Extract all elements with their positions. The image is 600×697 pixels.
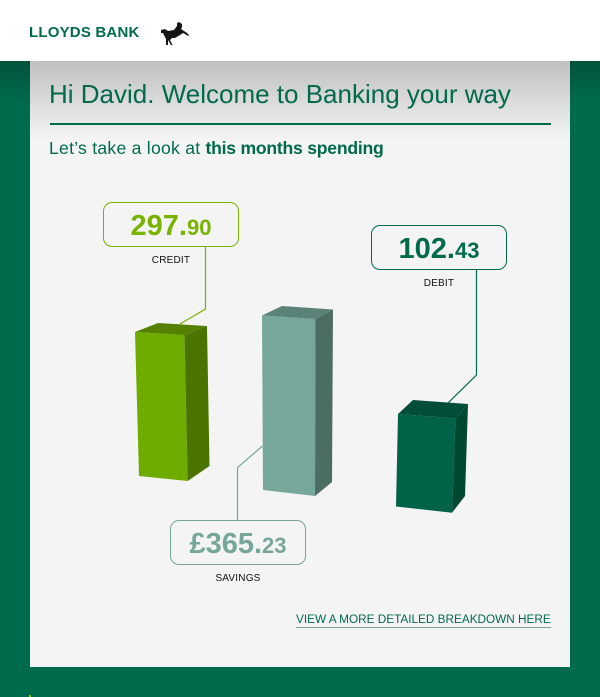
accent mark bottom left xyxy=(29,695,31,697)
debit value callout: 102.43 xyxy=(399,233,479,265)
savings leader line xyxy=(238,446,262,520)
subheading: Let’s take a look at this months spending xyxy=(49,138,384,158)
savings bar xyxy=(262,306,333,496)
panel: main content xyxy=(30,61,570,667)
icon: black horse xyxy=(161,22,189,45)
savings value callout xyxy=(170,520,306,565)
credit label: CREDIT xyxy=(152,255,190,266)
logo wordmark: LLOYDS BANK xyxy=(29,24,140,41)
credit bar xyxy=(135,323,210,481)
debit label: DEBIT xyxy=(424,278,454,289)
debit value callout xyxy=(371,225,507,270)
credit leader line xyxy=(180,246,206,324)
credit value callout: 297.90 xyxy=(131,210,211,242)
debit leader line xyxy=(448,269,476,403)
savings label: SAVINGS xyxy=(215,573,261,584)
savings value callout: £365.23 xyxy=(189,528,287,560)
debit bar xyxy=(396,400,468,513)
credit value callout xyxy=(103,202,239,247)
title: Hi David. Welcome to Banking your way xyxy=(49,79,511,109)
header bar xyxy=(0,0,600,61)
breakdown link: VIEW A MORE DETAILED BREAKDOWN HERE xyxy=(296,613,551,626)
